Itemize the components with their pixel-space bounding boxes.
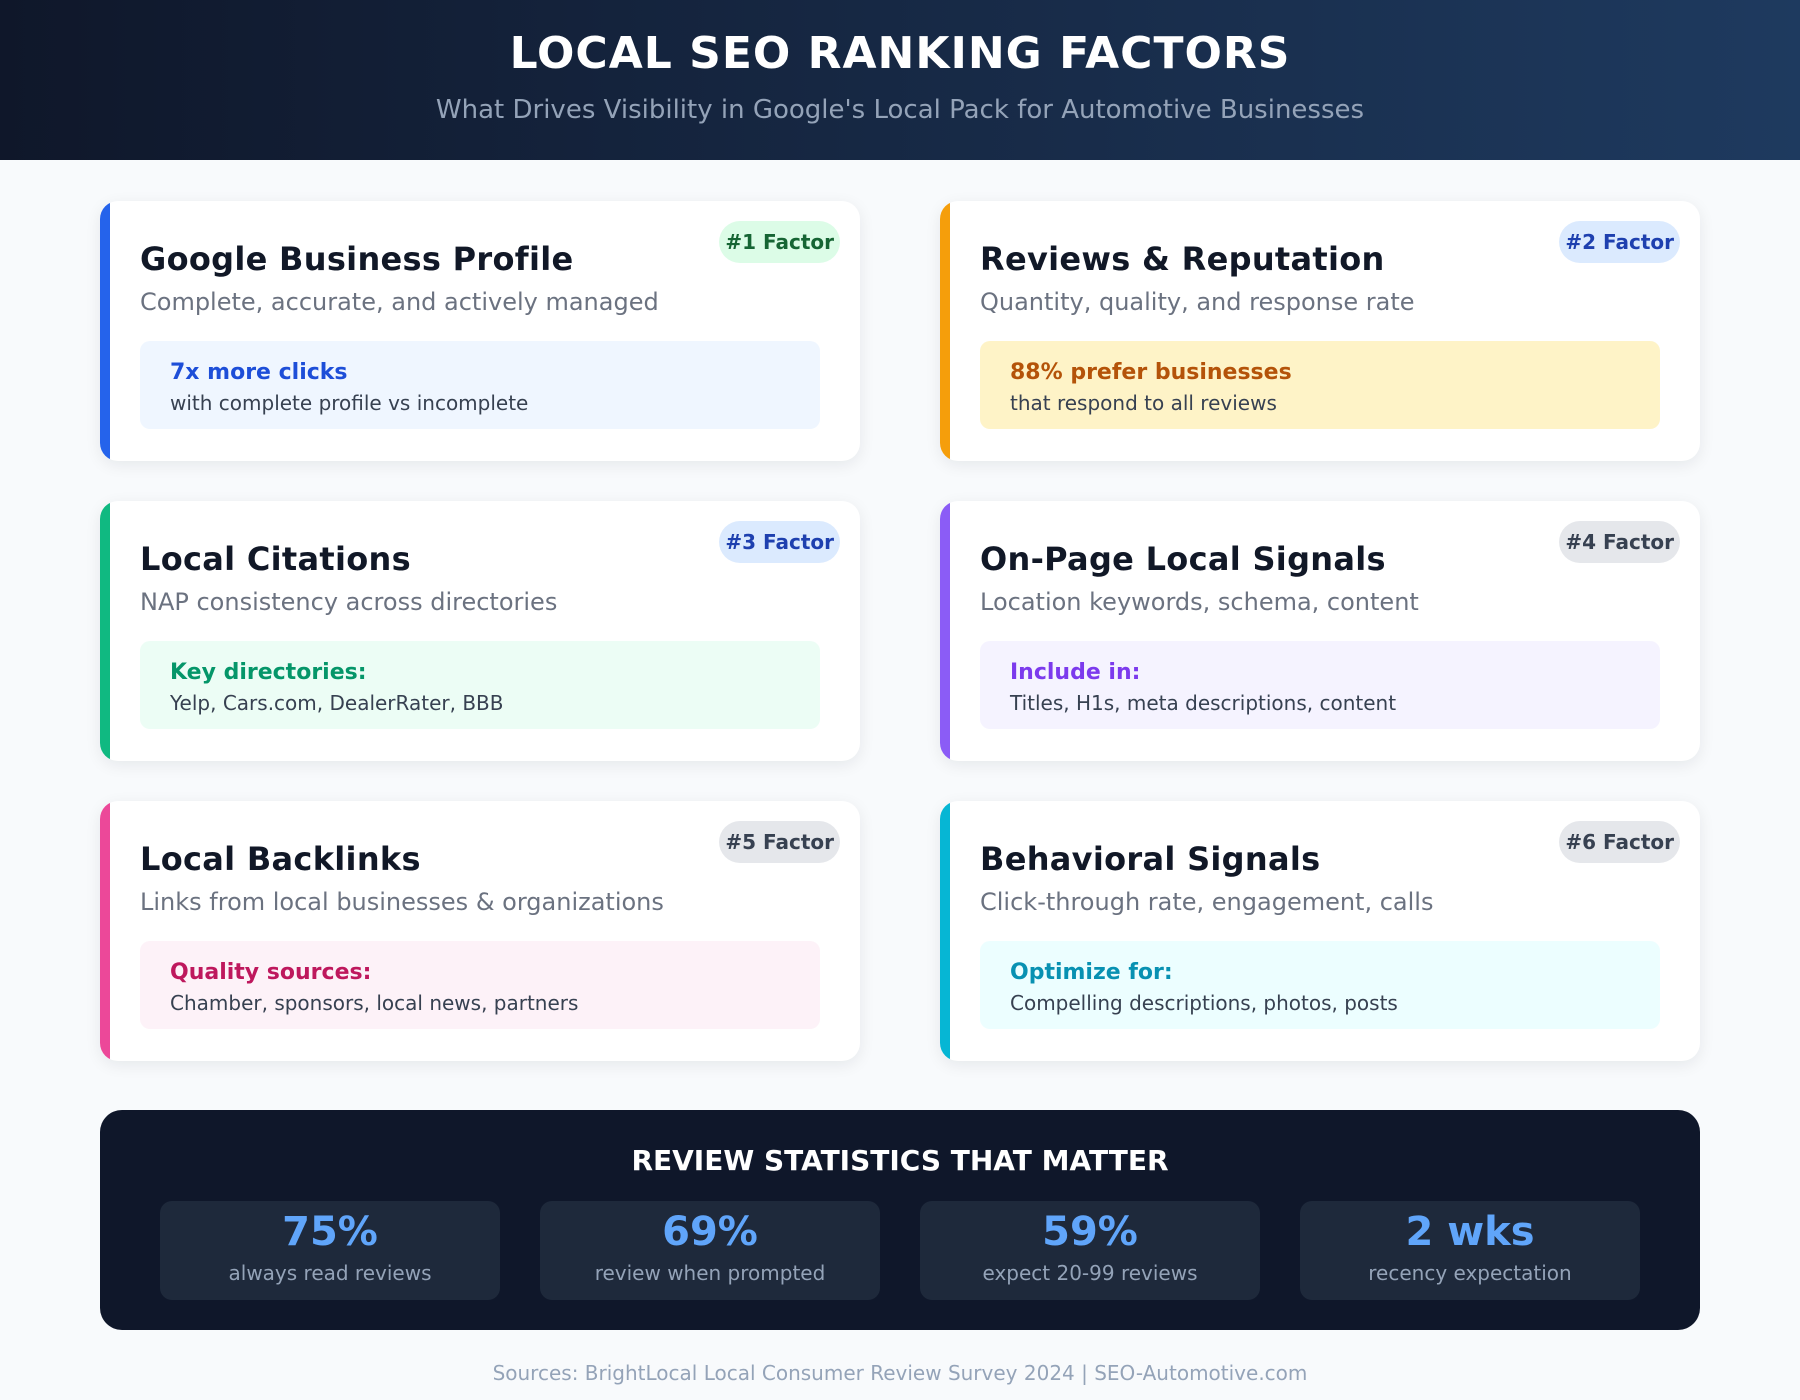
stat box (140, 341, 820, 429)
panel: backlinks (100, 801, 860, 1061)
badge: #5 Factor (725, 830, 834, 854)
info box: Chamber, sponsors, local news, partners (170, 991, 578, 1015)
subtext: Links from local businesses & organizations (140, 888, 664, 916)
stats heading: REVIEW STATISTICS THAT MATTER (631, 1144, 1169, 1177)
heading: Reviews & Reputation (980, 240, 1385, 278)
subtext: Location keywords, schema, content (980, 588, 1419, 616)
panel: on-page (940, 501, 1700, 761)
title: LOCAL SEO RANKING FACTORS (510, 28, 1290, 79)
stat: 2 wks: 2 wks (1405, 1209, 1535, 1255)
badge: #2 Factor (1565, 230, 1674, 254)
subtext: Complete, accurate, and actively managed (140, 288, 659, 316)
badge (719, 221, 840, 263)
info box: Include in: (1010, 660, 1140, 685)
panel: reviews (940, 201, 1700, 461)
subtext: NAP consistency across directories (140, 588, 557, 616)
stat: 75%: always read reviews (228, 1261, 432, 1285)
info box: Titles, H1s, meta descriptions, content (1010, 691, 1396, 715)
info box (140, 941, 820, 1029)
heading: Local Backlinks (140, 840, 421, 878)
stat: 59%: expect 20-99 reviews (982, 1261, 1198, 1285)
stat: 59% (920, 1201, 1260, 1300)
stat: 69%: 69% (662, 1209, 758, 1255)
footer sources: Sources: BrightLocal Local Consumer Review Survey 2024 | SEO-Automotive.com (493, 1361, 1307, 1385)
heading: On-Page Local Signals (980, 540, 1386, 578)
badge: #1 Factor (725, 230, 834, 254)
heading: Google Business Profile (140, 240, 574, 278)
stat: 59%: 59% (1042, 1209, 1138, 1255)
info box: Yelp, Cars.com, DealerRater, BBB (170, 691, 504, 715)
panel: google business profile (100, 201, 860, 461)
subtitle: What Drives Visibility in Google's Local Pack for Automotive Businesses (436, 95, 1364, 125)
subtext: Click-through rate, engagement, calls (980, 888, 1433, 916)
panel: citations (100, 501, 860, 761)
stat: 75% (160, 1201, 500, 1300)
stat: 69%: review when prompted (595, 1261, 825, 1285)
heading: Local Citations (140, 540, 411, 578)
panel: behavioral (940, 801, 1700, 1061)
badge (1559, 821, 1680, 863)
panel: review statistics (100, 1110, 1700, 1330)
stat box: 88% prefer businesses (1010, 360, 1292, 385)
stat: 69% (540, 1201, 880, 1300)
info box (980, 941, 1660, 1029)
info box: Key directories: (170, 660, 367, 685)
info box (980, 641, 1660, 729)
stat: 75%: 75% (282, 1209, 378, 1255)
badge: #4 Factor (1565, 530, 1674, 554)
info box: Quality sources: (170, 960, 371, 985)
stat box: 7x more clicks (170, 360, 348, 385)
badge: #3 Factor (725, 530, 834, 554)
badge (719, 821, 840, 863)
badge: #6 Factor (1565, 830, 1674, 854)
badge (719, 521, 840, 563)
info box: Compelling descriptions, photos, posts (1010, 991, 1398, 1015)
header (0, 0, 1800, 160)
stat box (980, 341, 1660, 429)
subtext: Quantity, quality, and response rate (980, 288, 1414, 316)
stat box: that respond to all reviews (1010, 391, 1277, 415)
stat: 2 wks (1300, 1201, 1640, 1300)
badge (1559, 521, 1680, 563)
stat: 2 wks: recency expectation (1368, 1261, 1572, 1285)
heading: Behavioral Signals (980, 840, 1320, 878)
info box: Optimize for: (1010, 960, 1173, 985)
info box (140, 641, 820, 729)
badge (1559, 221, 1680, 263)
stat box: with complete profile vs incomplete (170, 391, 528, 415)
